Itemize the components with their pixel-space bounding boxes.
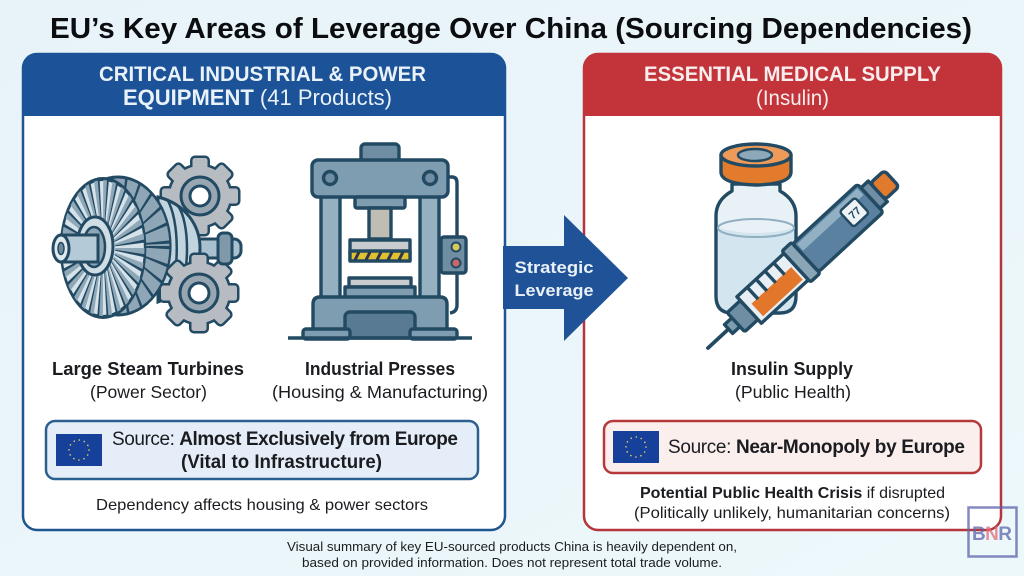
footer note: based on provided information. Does not represent total trade volume. [302,555,722,570]
note: potential public health crisis: (Politically unlikely, humanitarian concerns) [634,505,950,522]
label: industrial presses: (Housing & Manufacturing) [272,382,488,402]
front blade disc [61,179,145,317]
icon: upper gear [162,158,238,234]
label: large steam turbines: Large Steam Turbines [52,359,244,379]
needle [708,328,730,348]
press columns [321,190,340,300]
turbine shaft front [61,235,98,262]
turbine shaft rear [165,239,241,258]
panel: critical industrial and power equipment [22,53,506,530]
callout: source almost exclusively from Europe: Source: Almost Exclusively from Europe [112,429,458,450]
label: industrial presses [272,359,488,402]
panel header: left: CRITICAL INDUSTRIAL & POWER [99,62,426,86]
footer note [287,539,737,570]
lower die [349,278,411,287]
platen with hazard stripes [350,240,410,260]
label: insulin supply [731,359,853,402]
panel header: right: ESSENTIAL MEDICAL SUPPLY [644,62,941,86]
label: insulin supply: (Public Health) [735,382,851,402]
icon: EU flag [613,431,659,463]
ram [369,208,391,239]
arrow: strategic leverage [503,215,628,341]
hydraulic line [448,177,457,313]
callout: source near-monopoly by Europe: Source: Near-Monopoly by Europe [668,437,965,458]
note: potential public health crisis: Potential Public Health Crisis if disrupted [640,485,945,502]
icon: industrial press [288,144,472,339]
arrow: strategic leverage: Leverage [514,281,594,300]
label: large steam turbines: (Power Sector) [90,382,207,402]
callout: source almost exclusively from Europe [46,421,478,479]
panel header: left: EQUIPMENT (41 Products) [123,85,392,110]
icon: insulin pen [694,163,906,363]
dose window [839,198,869,227]
panel: essential medical supply [583,53,1002,530]
logo: BNR watermark: BNR [972,524,1012,545]
crown [312,160,448,197]
base [313,297,447,336]
panel header: right [583,53,1002,116]
control box [441,237,466,273]
logo: BNR watermark [968,508,1016,556]
callout: source almost exclusively from Europe: (Vital to Infrastructure) [181,452,382,473]
icon: steam turbine with gears [53,158,241,331]
dial cap [870,170,899,199]
arrow: strategic leverage: Strategic [514,258,594,277]
title: EU’s Key Areas of Leverage Over China (Sourcing Dependencies) [50,13,972,45]
top cap [361,144,399,164]
turbine shaft flange [218,233,232,264]
panel header: left [22,53,506,116]
footer note: Visual summary of key EU-sourced products China is heavily dependent on, [287,539,737,554]
label: industrial presses: Industrial Presses [305,359,455,379]
turbine hub [77,217,113,275]
icon: lower gear [161,255,237,331]
label: insulin supply: Insulin Supply [731,359,853,379]
ram mount [355,197,405,208]
icon: insulin vial [716,144,796,313]
label: large steam turbines [52,359,244,402]
note: potential public health crisis [634,485,950,522]
icon: EU flag [56,434,102,466]
rear blade disc [66,177,170,315]
dose window: 77 [847,205,864,222]
collar [782,242,820,282]
note: dependency: Dependency affects housing & power sectors [96,497,428,514]
callout: source near-monopoly by Europe [604,421,981,473]
panel header: right: (Insulin) [756,86,829,110]
cartridge [737,253,808,323]
pen body [793,184,883,272]
turbine casing [158,197,200,302]
